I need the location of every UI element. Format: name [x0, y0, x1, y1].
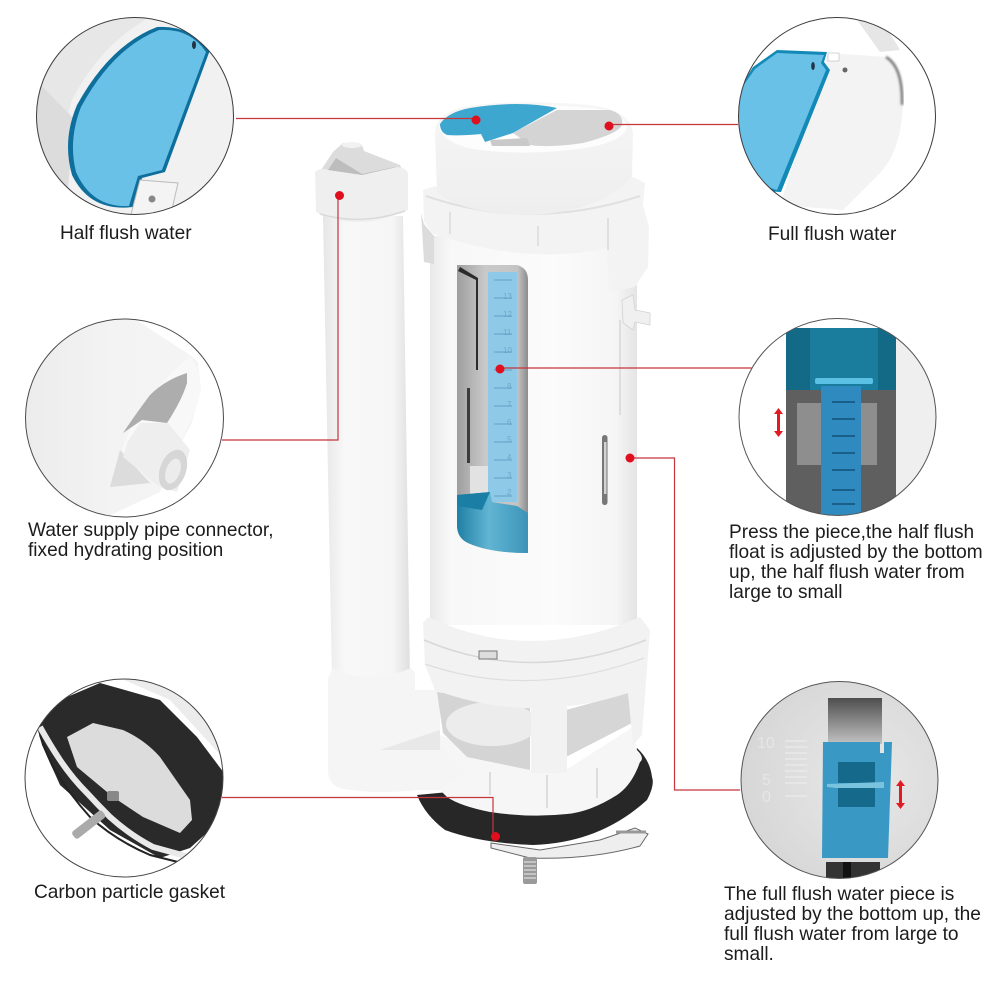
- callout line: pipe connector: [222, 191, 344, 440]
- label: half flush water: Half flush water: [60, 223, 192, 244]
- label: half flush adjuster: up, the half flush water from: [729, 562, 965, 583]
- tab: [130, 180, 178, 218]
- gasket: [417, 748, 653, 845]
- detail circle: half flush button: [36, 17, 234, 218]
- label: full flush water: Full flush water: [768, 224, 897, 245]
- label: full flush adjuster: small.: [724, 944, 774, 965]
- scale numbers: 7: [507, 400, 512, 409]
- callout line: full flush adjuster: [626, 454, 740, 790]
- detail circle: carbon particle gasket: [25, 678, 225, 878]
- upper collar: [423, 177, 649, 292]
- detail circle: water supply connector: [25, 316, 225, 520]
- side clip: [622, 295, 650, 330]
- label: full flush adjuster: The full flush water piece is: [724, 884, 954, 905]
- label: half flush adjuster: Press the piece,the half flush: [729, 522, 974, 543]
- detail circle: half flush adjuster: [738, 318, 938, 518]
- callout line: half flush water: [236, 116, 480, 124]
- detail circle: full flush adjuster: 0: [762, 789, 771, 806]
- pipe top collar: [315, 167, 408, 222]
- label: full flush adjuster: adjusted by the bottom up, the: [724, 904, 981, 925]
- product: tank body: [421, 177, 650, 625]
- product: level window with scale: [457, 265, 528, 560]
- side slot: [602, 435, 608, 505]
- detail circle: full flush adjuster: 10: [757, 735, 775, 752]
- cage window: [437, 692, 530, 770]
- scale numbers: 8: [507, 382, 512, 391]
- detail circle: full flush button: [738, 17, 936, 215]
- detail circle: full flush adjuster: 5: [762, 772, 771, 789]
- scale numbers: 4: [507, 453, 512, 462]
- blue slider: [822, 742, 892, 858]
- scale numbers: 2: [507, 488, 512, 497]
- icon: red double arrow: [896, 780, 905, 809]
- product: base and cage: [417, 617, 653, 884]
- icon: red double arrow: [774, 408, 783, 437]
- label: carbon particle gasket: Carbon particle gasket: [34, 882, 226, 903]
- base collar: [423, 617, 650, 745]
- detail circle: full flush adjuster: [740, 680, 940, 880]
- label: water supply pipe connector: fixed hydrating position: [28, 540, 223, 561]
- scale numbers: 11: [503, 328, 512, 337]
- label: half flush adjuster: float is adjusted by the bottom: [729, 542, 983, 563]
- half flush button: [440, 104, 557, 142]
- scale numbers: 5: [507, 435, 512, 444]
- pipe bottom sleeve and arm: [328, 668, 470, 792]
- bolt: [523, 857, 537, 884]
- scale numbers: 13: [503, 292, 512, 301]
- product: flush cap: [435, 102, 633, 215]
- scale numbers: 12: [503, 310, 512, 319]
- pipe top nozzle: [320, 143, 405, 176]
- product: overflow pipe: [315, 142, 470, 792]
- float: [457, 492, 528, 553]
- label: water supply pipe connector: Water supply pipe connector,: [28, 520, 274, 541]
- blue blade: [738, 50, 830, 192]
- full flush button: [513, 110, 622, 146]
- metal bracket: [491, 828, 648, 858]
- label: full flush adjuster: full flush water from large to: [724, 924, 959, 945]
- label: half flush adjuster: large to small: [729, 582, 843, 603]
- scale numbers: 6: [507, 418, 512, 427]
- callout line: half flush adjuster: [496, 364, 752, 374]
- blue blade: [68, 27, 210, 208]
- lower ring: [440, 727, 642, 816]
- scale numbers: 3: [507, 471, 512, 480]
- center post: [531, 697, 567, 773]
- callout line: gasket: [222, 798, 500, 841]
- scale numbers: [503, 292, 512, 497]
- callout line: full flush water: [604, 122, 738, 130]
- scale numbers: 10: [503, 346, 512, 355]
